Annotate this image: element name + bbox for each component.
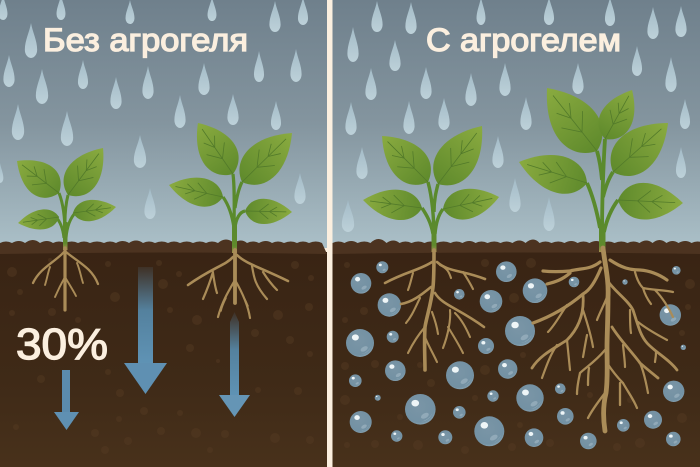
soil, left panel: [0, 240, 327, 467]
panel: with agrogel: [332, 0, 700, 467]
stem base: [599, 225, 606, 252]
roots: [385, 250, 485, 370]
figure: 30%: 30%: [16, 320, 108, 369]
leaves: [514, 74, 684, 221]
title: with agrogel: С агрогелем: [426, 22, 621, 58]
roots: [188, 250, 288, 318]
rain drops, left panel: [0, 0, 308, 219]
water bubbles: [346, 261, 686, 449]
leaves: [7, 138, 117, 233]
stem base: [63, 222, 68, 250]
medium-large plant: [361, 114, 502, 370]
soil, right panel: [332, 239, 700, 467]
arrow: medium: [219, 312, 250, 417]
small plant: [7, 138, 117, 310]
medium plant: [166, 113, 305, 318]
title: without agrogel: Без агрогеля: [43, 22, 248, 58]
sky with rain background: [332, 0, 700, 248]
panel: without agrogel: [0, 0, 327, 467]
leaves: [361, 114, 502, 224]
stem: [55, 193, 76, 238]
stem base: [432, 225, 436, 252]
roots: [532, 248, 677, 431]
stem: [223, 174, 245, 240]
leaves: [166, 113, 305, 225]
sky with rain background: [0, 0, 327, 248]
stem: [587, 139, 618, 240]
stem base: [232, 225, 237, 253]
arrow: short: [54, 370, 79, 430]
roots: [33, 248, 98, 310]
tall plant: [514, 74, 684, 431]
arrow: long, large: [124, 267, 167, 394]
rain drops, right panel: [342, 0, 690, 232]
stem: [422, 182, 443, 240]
